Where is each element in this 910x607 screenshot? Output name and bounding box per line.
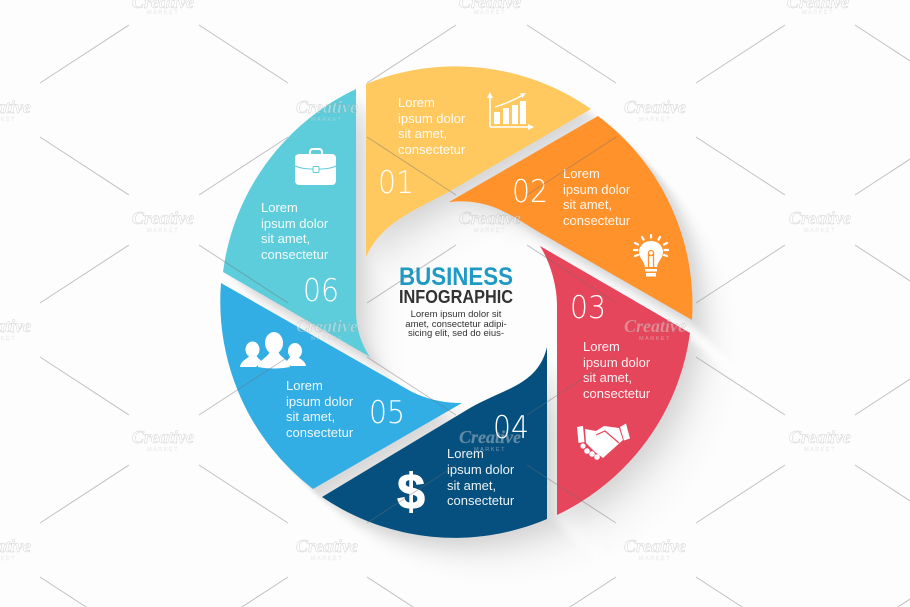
text: segment 01: sit amet, (398, 126, 447, 141)
watermark logos: MARKET (804, 228, 836, 234)
text: segment 02: ipsum dolor (563, 182, 631, 197)
watermark logos: Creative (624, 316, 686, 336)
text: segment 04: Lorem (447, 446, 484, 461)
center body text: Lorem ipsum dolor sit (411, 309, 502, 320)
center body text: amet, consectetur adipi- (405, 319, 507, 330)
watermark logos: MARKET (147, 447, 179, 453)
panel: segment 01 (366, 66, 591, 257)
text: segment 02: consectetur (563, 213, 631, 228)
text: segment 06: Lorem (261, 200, 298, 215)
icon: briefcase (295, 149, 336, 185)
watermark logos: MARKET (147, 10, 179, 16)
watermark logos: Creative (789, 427, 851, 447)
center body text: sicing elit, sed do eius- (408, 328, 504, 339)
watermark logos: Creative (459, 208, 521, 228)
watermark logos: Creative (296, 316, 358, 336)
text: segment 06: ipsum dolor (261, 216, 329, 231)
text: segment 06: consectetur (261, 247, 329, 262)
text: segment 05: consectetur (286, 425, 354, 440)
text: segment 01: consectetur (398, 142, 466, 157)
text: segment 01: ipsum dolor (398, 111, 466, 126)
panel: segment 05 (220, 283, 462, 489)
text: segment 03: sit amet, (583, 370, 632, 385)
watermark logos: Creative (459, 427, 521, 447)
icon: light bulb (634, 235, 668, 276)
watermark logos: Creative (132, 208, 194, 228)
watermark logos: Creative (296, 97, 358, 117)
panel: segment 04 (322, 347, 547, 538)
watermark logos: MARKET (311, 117, 343, 123)
watermark logos: Creative (624, 97, 686, 117)
text: segment 06: sit amet, (261, 231, 310, 246)
icon: dollar: $ (397, 464, 425, 520)
watermark logos: MARKET (311, 556, 343, 562)
text: segment 02: Lorem (563, 166, 600, 181)
text: segment 03: Lorem (583, 339, 620, 354)
text: segment 03: consectetur (583, 386, 651, 401)
watermark logos: MARKET (639, 556, 671, 562)
text: segment 01: Lorem (398, 95, 435, 110)
icon: handshake (577, 424, 630, 460)
text: segment 02: sit amet, (563, 197, 612, 212)
panel: segment 02 (449, 116, 692, 320)
watermark logos: Creative (132, 427, 194, 447)
panel: segment 03 (540, 246, 690, 515)
watermark logos: MARKET (804, 447, 836, 453)
watermark logos: MARKET (639, 117, 671, 123)
watermark logos: Creative (296, 536, 358, 556)
number 06: 06 (303, 273, 339, 309)
watermark logos: MARKET (474, 228, 506, 234)
text: segment 05: Lorem (286, 378, 323, 393)
watermark logos: MARKET (474, 10, 506, 16)
icon: bar chart (487, 92, 534, 130)
text: segment 04: sit amet, (447, 478, 496, 493)
watermark logos: Creative (789, 208, 851, 228)
number 05: 05 (369, 395, 405, 431)
number 02: 02 (512, 174, 548, 210)
text: segment 04: consectetur (447, 493, 515, 508)
watermark logos: MARKET (147, 228, 179, 234)
watermark logos: MARKET (802, 10, 834, 16)
number 03: 03 (570, 290, 606, 326)
heading: business: BUSINESS (399, 263, 513, 291)
text: segment 05: sit amet, (286, 409, 335, 424)
heading: infographic: INFOGRAPHIC (399, 287, 513, 307)
watermark logos: MARKET (474, 447, 506, 453)
watermark logos: Creative (624, 536, 686, 556)
long shadow beneath the ring (223, 69, 738, 584)
panel: segment 06 (223, 89, 370, 357)
watermark logos: MARKET (639, 336, 671, 342)
center title (399, 263, 513, 339)
text: segment 03: ipsum dolor (583, 355, 651, 370)
watermark logos: MARKET (311, 336, 343, 342)
icon: people (240, 332, 306, 368)
number 04: 04 (493, 410, 529, 446)
text: segment 04: ipsum dolor (447, 462, 515, 477)
number 01: 01 (378, 165, 414, 201)
text: segment 05: ipsum dolor (286, 394, 354, 409)
